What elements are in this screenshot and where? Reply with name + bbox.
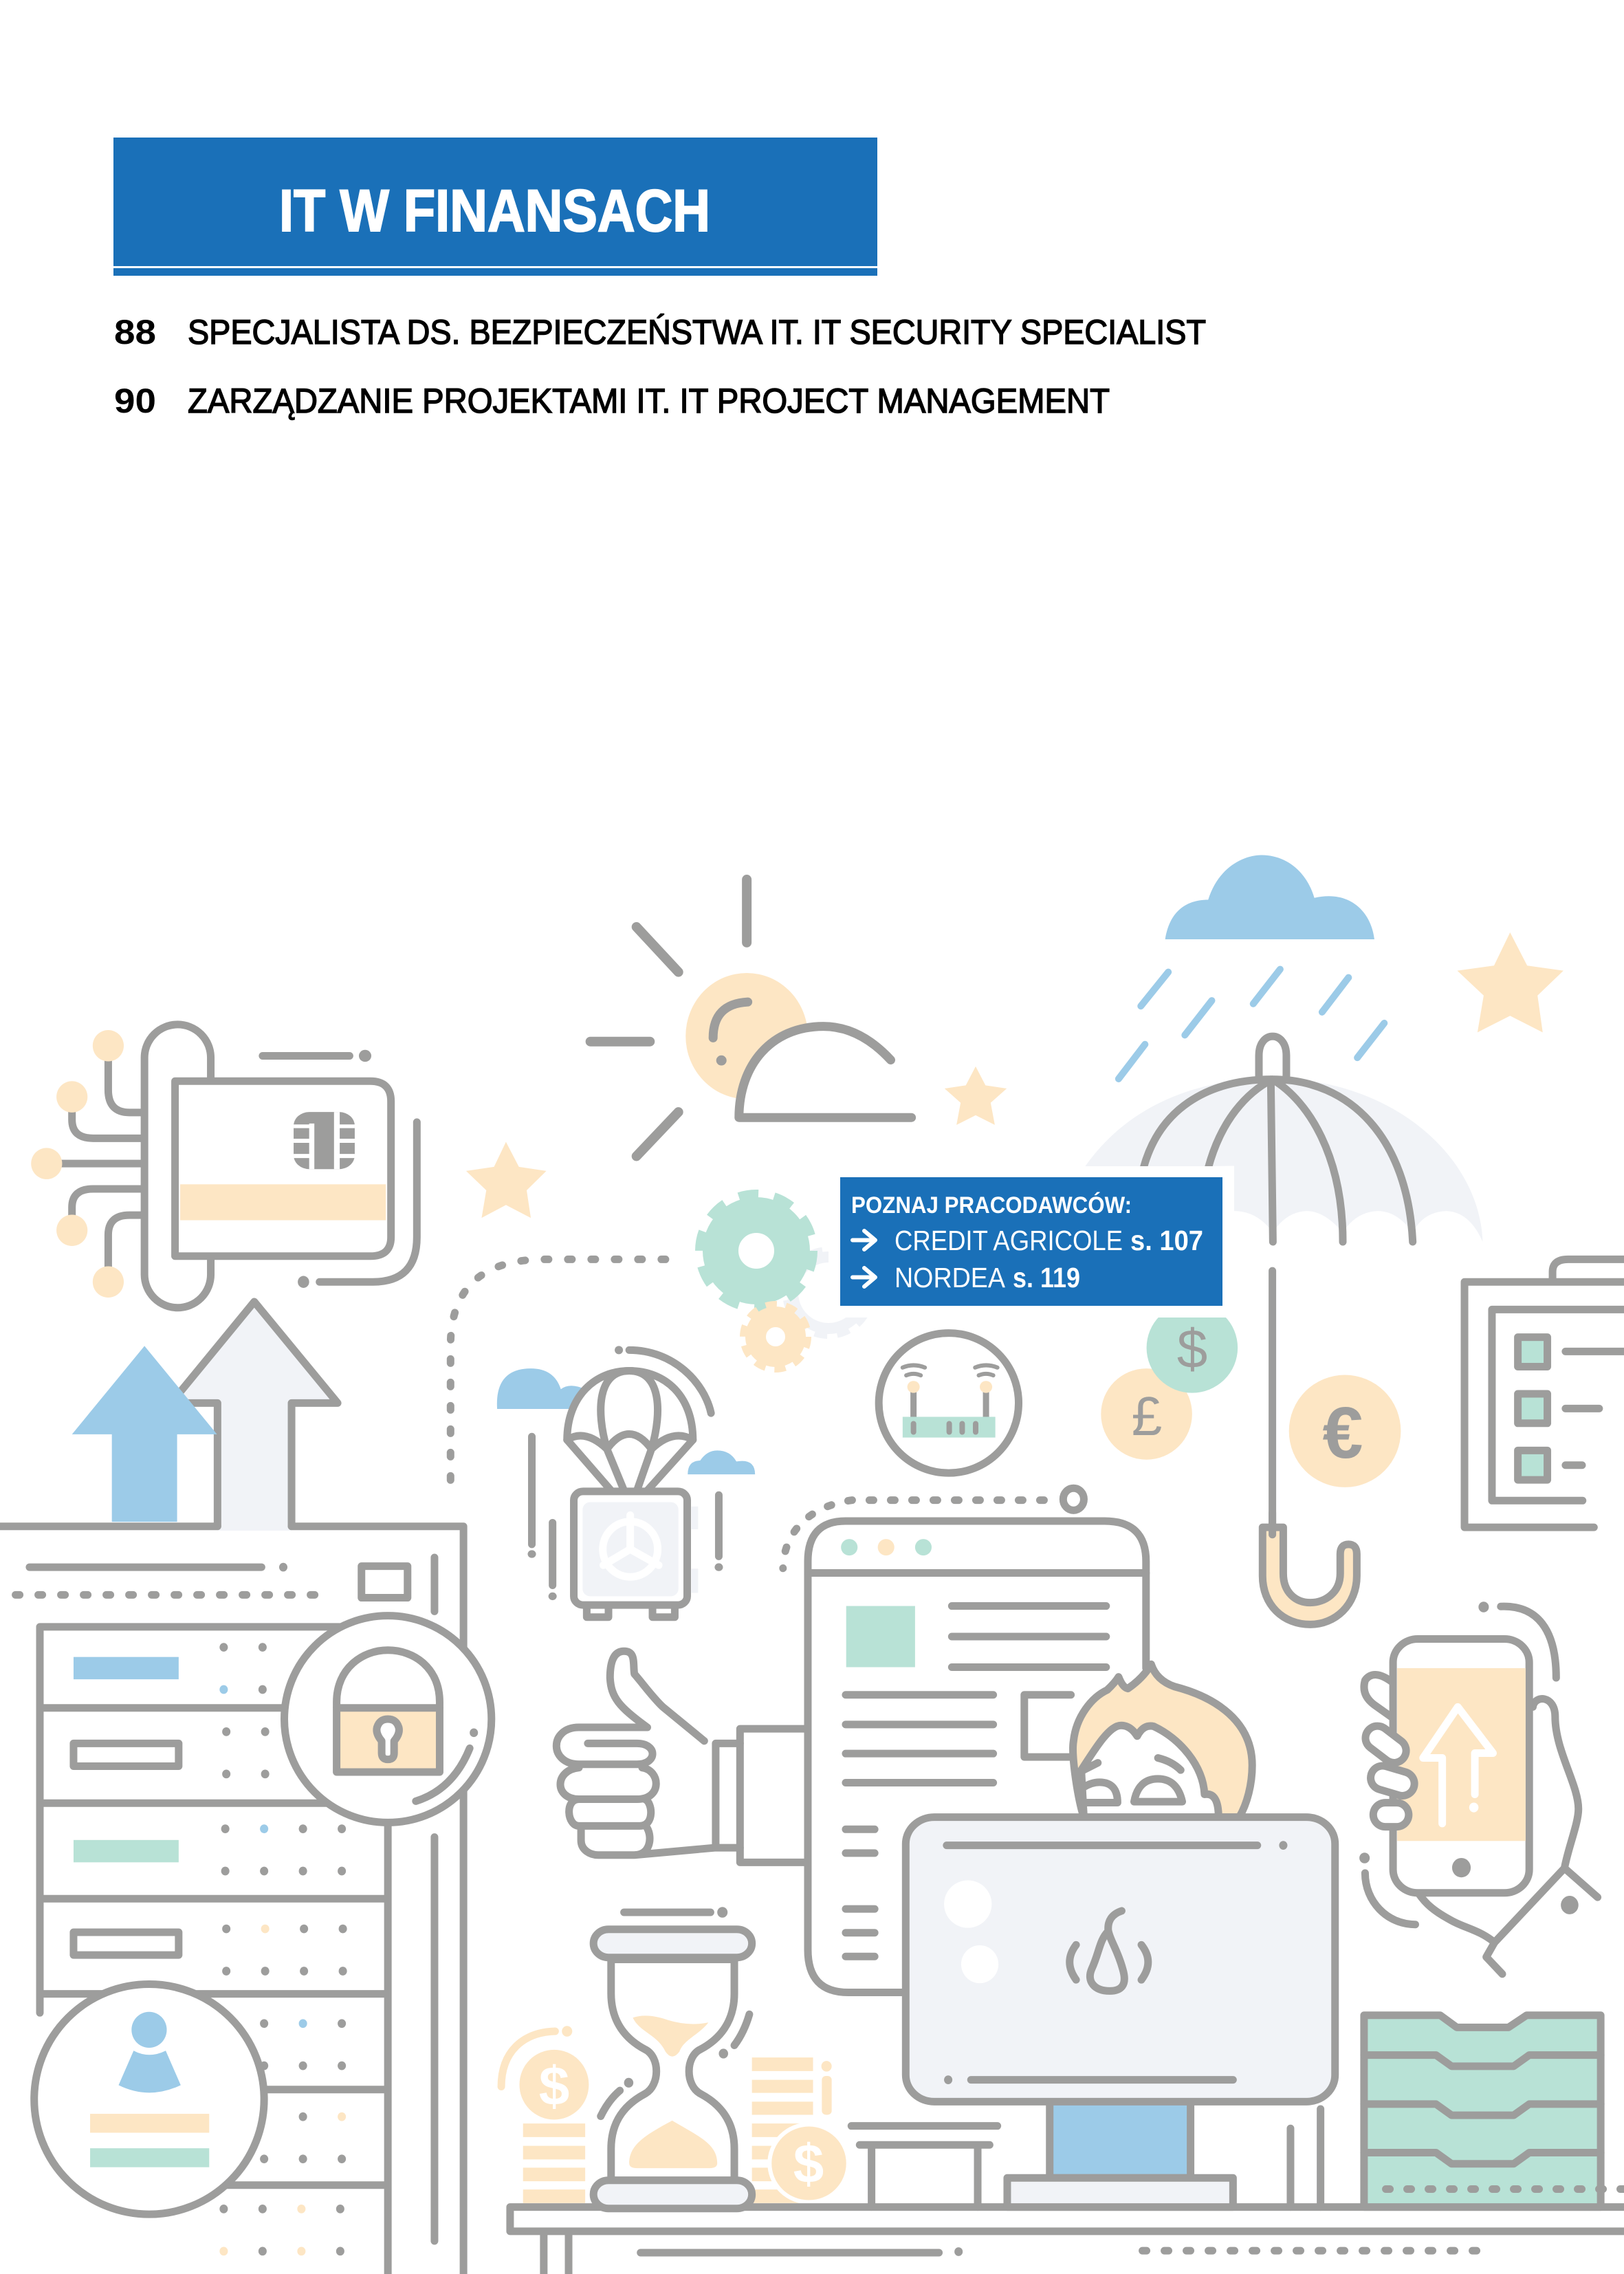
entry 88: SPECJALISTA DS. BEZPIECZEŃSTWA IT. IT SECURITY SPECIALIST xyxy=(188,313,1206,351)
callout: employers: CREDIT AGRICOLE xyxy=(895,1225,1123,1256)
handle xyxy=(1262,1527,1357,1624)
icon: server rack xyxy=(0,1527,463,2274)
callout: employers: s. 119 xyxy=(1013,1262,1080,1293)
euro coin xyxy=(1289,1375,1401,1487)
icon: star left xyxy=(466,1142,547,1218)
icon: rain cloud xyxy=(1119,855,1384,1079)
icon: document trays xyxy=(1364,2015,1624,2207)
dotted line with ring xyxy=(783,1488,1084,1568)
icon: router in circle xyxy=(879,1333,1019,1473)
icon: light gear xyxy=(787,1251,870,1334)
title banner: IT W FINANSACH xyxy=(279,178,710,244)
icon: thumbs up xyxy=(556,1651,808,1862)
icon: parachute with safe xyxy=(497,1346,755,1617)
canopy xyxy=(1084,1078,1482,1242)
entry 88: 88 xyxy=(114,313,156,351)
icon: umbrella xyxy=(1084,1036,1482,1624)
icon: hourglass xyxy=(593,1907,752,2209)
callout: employers: NORDEA xyxy=(895,1262,1006,1293)
icon: browser window xyxy=(808,1521,1146,1993)
icon: currency coins: € xyxy=(1323,1392,1363,1474)
entry 90: 90 xyxy=(114,382,156,420)
icon: hand holding phone xyxy=(1359,1601,1598,1974)
safe xyxy=(528,1491,723,1617)
contents list xyxy=(114,313,1206,420)
logo pear xyxy=(1070,1911,1148,1991)
callout: employers: s. 107 xyxy=(1130,1225,1203,1256)
icon: small table and lines xyxy=(851,2109,1321,2207)
dollar coin xyxy=(1147,1302,1238,1393)
title banner xyxy=(113,138,877,276)
icon: currency coins: $ xyxy=(1177,1318,1207,1379)
illustration xyxy=(0,855,1624,2274)
callout: employers xyxy=(829,1166,1234,1318)
icon: blue up arrow xyxy=(72,1346,217,1522)
icon: padlock in circle xyxy=(285,1616,492,1822)
icon: currency coins xyxy=(1101,1302,1401,1487)
icon: desk xyxy=(510,2207,1624,2274)
icon: sun behind cloud xyxy=(591,879,912,1156)
icon: currency coins: £ xyxy=(1132,1386,1162,1447)
parachute xyxy=(532,1346,718,1586)
coin dollar signs: $ xyxy=(793,2133,824,2194)
coin dollar signs: $ xyxy=(539,2055,569,2117)
pound coin xyxy=(1101,1368,1192,1460)
icon: peach gear xyxy=(744,1305,807,1368)
status lights xyxy=(219,1643,347,2255)
icon: star right xyxy=(1457,932,1563,1032)
coin dollar signs xyxy=(539,2055,824,2194)
icon: star middle xyxy=(945,1067,1007,1125)
icon: payment card with circuit xyxy=(31,1025,417,1308)
dotted connector xyxy=(450,1259,666,1488)
icon: clipboard checklist xyxy=(1464,1259,1624,1527)
callout: employers: POZNAJ PRACODAWCÓW: xyxy=(851,1192,1132,1218)
icon: user profile in circle xyxy=(34,1985,264,2214)
icon: grey up arrow xyxy=(176,1302,338,1531)
icon: person behind monitor xyxy=(1073,1664,1252,1817)
icon: coin stacks xyxy=(501,2026,848,2203)
entry 90: ZARZĄDZANIE PROJEKTAMI IT. IT PROJECT MANAGEMENT xyxy=(188,382,1110,420)
icon: desktop monitor xyxy=(906,1817,1335,2207)
icon: mint gear xyxy=(701,1196,811,1306)
clouds xyxy=(497,1368,755,1474)
